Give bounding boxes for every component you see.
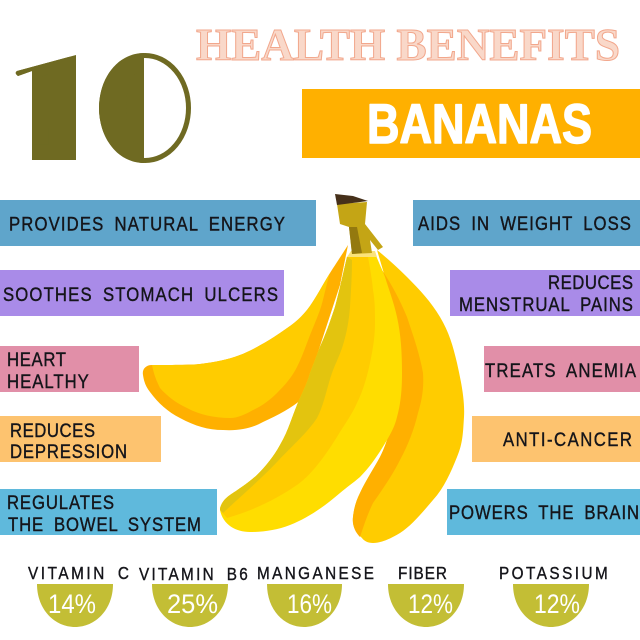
digit 1 [16, 55, 76, 160]
benefit: soothes stomach ulcers: SOOTHES STOMACH ULCERS [3, 284, 278, 305]
middle banana [220, 253, 402, 532]
benefit: anti-cancer: ANTI-CANCER [503, 429, 632, 450]
illustration: banana bunch [143, 194, 464, 543]
digit 0 half filled: 0 [92, 25, 200, 192]
nutrient: potassium 12%: 12% [534, 589, 580, 619]
benefit: regulates the bowel system [0, 489, 217, 535]
nutrient: potassium 12%: POTASSIUM [499, 563, 608, 583]
benefit: heart healthy: HEART [7, 349, 66, 370]
benefit: powers the brain: POWERS THE BRAIN [449, 502, 639, 523]
nutrient: manganese 16% [257, 563, 374, 627]
benefit: reduces menstrual pains: REDUCES [548, 272, 633, 293]
nutrient: vitamin b6 25% [139, 564, 248, 627]
benefit: regulates the bowel system: THE BOWEL SYSTEM [8, 514, 201, 535]
title: health benefits: HEALTH BENEFITS [196, 20, 620, 70]
left banana [143, 245, 348, 430]
benefit: powers the brain [447, 489, 640, 535]
nutrient: vitamin b6 25%: VITAMIN B6 [139, 564, 248, 584]
nutrient: manganese 16%: 16% [287, 589, 332, 619]
benefit: heart healthy: HEALTHY [7, 371, 89, 392]
benefit: reduces menstrual pains: MENSTRUAL PAINS [459, 294, 633, 315]
benefit: regulates the bowel system: REGULATES [7, 492, 114, 513]
right banana [353, 250, 464, 543]
big number 10 [16, 53, 191, 163]
nutrient: vitamin c 14%: VITAMIN C [28, 563, 129, 583]
banana stem [335, 194, 383, 257]
nutrient: manganese 16%: MANGANESE [257, 563, 374, 583]
benefit: aids in weight loss: AIDS IN WEIGHT LOSS [418, 213, 631, 234]
nutrient: fiber 12% [388, 563, 464, 627]
nutrient: vitamin b6 25%: 25% [167, 589, 218, 619]
benefit: reduces depression: DEPRESSION [10, 441, 127, 462]
benefit: aids in weight loss [413, 200, 640, 246]
benefit: reduces depression: REDUCES [10, 420, 95, 441]
digit 0 half filled [99, 53, 191, 163]
benefit: anti-cancer [472, 416, 640, 462]
nutrient: vitamin c 14%: 14% [48, 589, 96, 619]
nutrient: vitamin c 14% [28, 563, 129, 627]
benefit: soothes stomach ulcers [0, 270, 284, 316]
nutrient: fiber 12%: FIBER [398, 563, 447, 583]
benefit: treats anemia: TREATS ANEMIA [485, 360, 636, 381]
benefit: reduces menstrual pains [450, 270, 640, 316]
nutrient: fiber 12%: 12% [408, 589, 453, 619]
banner: bananas: BANANAS [367, 92, 592, 155]
benefit: heart healthy [0, 346, 139, 392]
benefit: reduces depression [0, 416, 161, 462]
nutrient: potassium 12% [499, 563, 608, 627]
benefit: provides natural energy [0, 200, 316, 246]
benefit: treats anemia [484, 346, 640, 392]
benefit: provides natural energy: PROVIDES NATURAL ENERGY [9, 214, 285, 235]
